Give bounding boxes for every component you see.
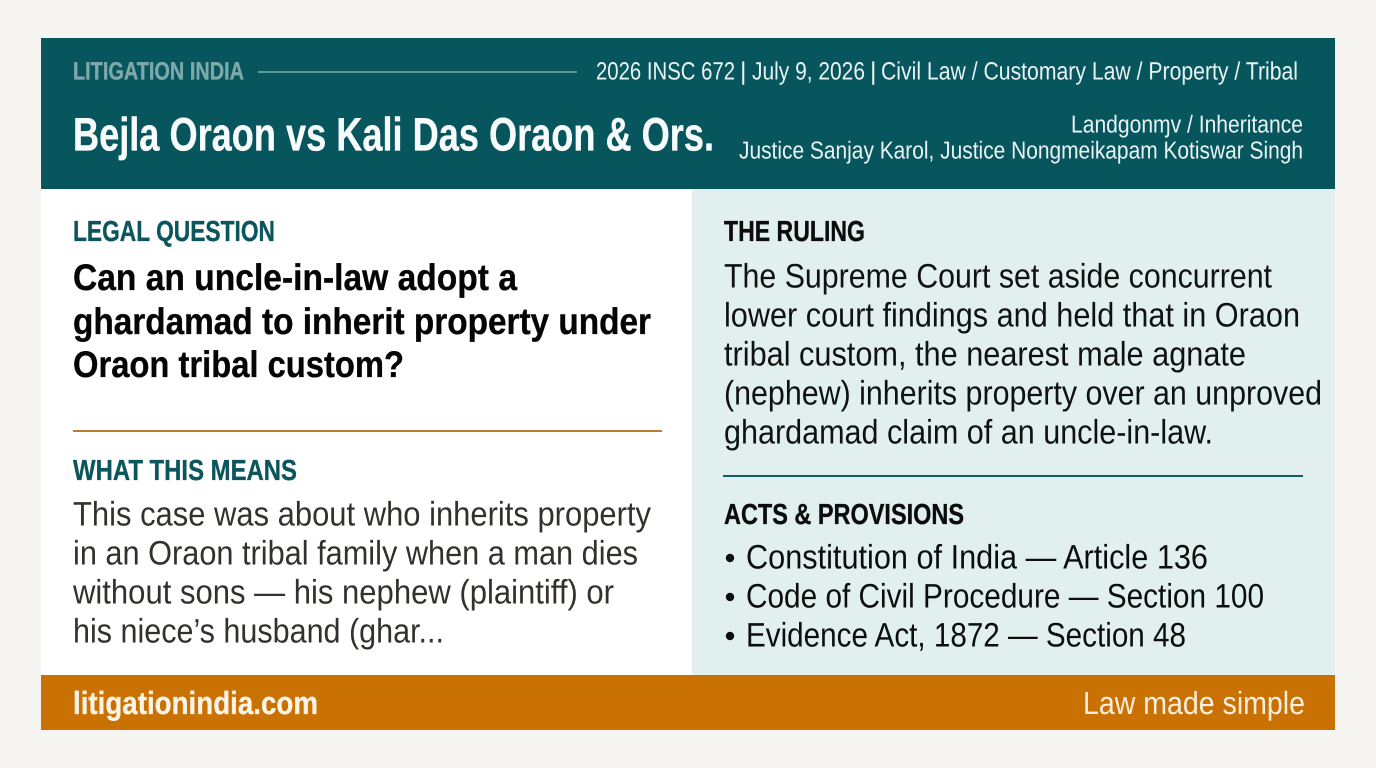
case metadata: |	[740, 58, 746, 86]
provisions list	[726, 538, 1264, 654]
question text: Oraon tribal custom?	[73, 344, 404, 385]
ruling text	[724, 258, 1322, 452]
case metadata: July 9, 2026	[752, 58, 865, 86]
question text: Can an uncle-in-law adopt a	[73, 257, 517, 298]
question text: ghardamad to inherit property under	[73, 301, 651, 342]
explanation text: This case was about who inherits property	[73, 496, 651, 534]
provisions list: Evidence Act, 1872 — Section 48	[746, 616, 1186, 654]
question text	[73, 257, 651, 385]
website: litigationindia.com	[73, 685, 318, 721]
explanation text: his niece’s husband (ghar...	[73, 612, 444, 650]
ruling text: (nephew) inherits property over an unproved	[724, 374, 1322, 412]
panel: footer	[41, 675, 1335, 730]
heading: what this means: WHAT THIS MEANS	[73, 455, 297, 487]
heading: acts and provisions: ACTS & PROVISIONS	[724, 499, 964, 531]
tagline: Law made simple	[1083, 685, 1305, 721]
subject tags: Landgonɱv / Inheritance	[1071, 112, 1303, 138]
panel: ruling and provisions	[692, 189, 1335, 675]
ruling text: tribal custom, the nearest male agnate	[724, 336, 1246, 374]
provisions list: Constitution of India — Article 136	[746, 538, 1208, 576]
brand label: LITIGATION INDIA	[73, 58, 244, 86]
ruling text: The Supreme Court set aside concurrent	[724, 258, 1272, 296]
explanation text: without sons — his nephew (plaintiff) or	[72, 574, 614, 612]
explanation text: in an Oraon tribal family when a man dies	[73, 534, 638, 572]
ruling text: lower court findings and held that in Oraon	[724, 296, 1300, 334]
heading: the ruling: THE RULING	[724, 216, 865, 248]
case metadata: |	[870, 58, 876, 86]
ruling text: ghardamad claim of an uncle-in-law.	[724, 414, 1213, 452]
provisions list: Code of Civil Procedure — Section 100	[746, 578, 1264, 616]
panel: legal question and meaning	[41, 189, 692, 675]
case metadata: 2026 INSC 672	[596, 58, 735, 86]
heading: legal question: LEGAL QUESTION	[73, 216, 275, 248]
panel: header	[41, 38, 1335, 189]
case metadata: Civil Law / Customary Law / Property / Tribal	[881, 58, 1298, 86]
case metadata	[596, 58, 1298, 86]
title: Bejla Oraon vs Kali Das Oraon & Ors.	[73, 108, 714, 160]
explanation text	[72, 496, 651, 650]
